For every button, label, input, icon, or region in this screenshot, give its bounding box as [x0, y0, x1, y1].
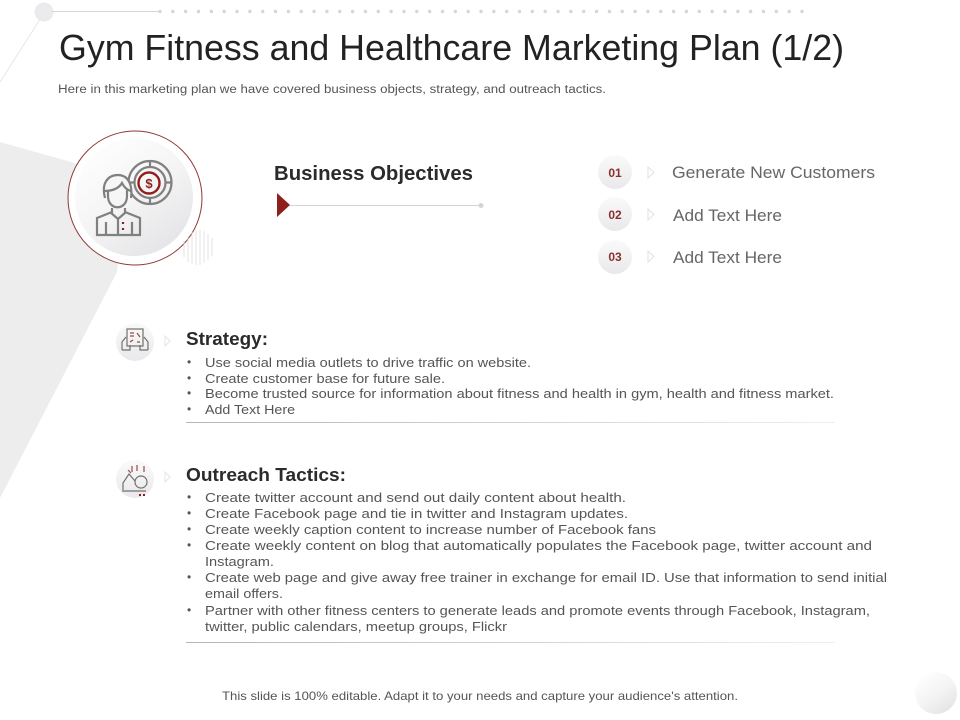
top decoration: [0, 2, 805, 82]
icon: strategy tablet: [116, 323, 154, 361]
list item 02: [598, 197, 782, 231]
text block: strategy list: [187, 355, 834, 417]
icon: outreach network: [116, 460, 154, 498]
text block: outreach list: Create weekly content on blog that automatically populates the Facebook page, twitter account and: [205, 538, 872, 553]
list item 01: Generate New Customers: [672, 163, 875, 182]
text block: outreach list: Create twitter account and send out daily content about health.: [205, 490, 626, 505]
heading: outreach tactics: Outreach Tactics:: [186, 465, 346, 485]
text block: strategy list: •: [187, 355, 191, 369]
heading: strategy: Strategy:: [186, 329, 268, 349]
background shape: [0, 142, 128, 498]
text block: outreach list: •: [187, 603, 191, 617]
text block: strategy list: Use social media outlets to drive traffic on website.: [205, 355, 531, 370]
text block: strategy list: •: [187, 386, 191, 400]
text block: strategy list: Add Text Here: [205, 402, 295, 417]
decorative lines: [184, 230, 212, 265]
icon: person: [97, 175, 140, 235]
corner decoration: [915, 672, 957, 714]
arrow: strategy: [165, 336, 170, 346]
list item 03: 03: [608, 250, 622, 264]
text block: outreach list: Create web page and give away free trainer in exchange for email ID. Use that information to send initial: [205, 570, 887, 585]
icon: target with dollar: $: [145, 176, 153, 191]
text block: outreach list: [187, 490, 887, 634]
text block: strategy list: •: [187, 371, 191, 385]
text block: strategy list: Create customer base for future sale.: [205, 371, 445, 386]
text block: outreach list: •: [187, 538, 191, 552]
arrow: outreach: [165, 472, 170, 482]
list item 03: Add Text Here: [673, 248, 782, 267]
list item 03: [598, 240, 782, 274]
text block: outreach list: twitter, public calendars, meetup groups, Flickr: [205, 619, 508, 634]
text block: strategy list: •: [187, 402, 191, 416]
footer note: This slide is 100% editable. Adapt it to your needs and capture your audience's attention.: [222, 689, 738, 703]
text block: outreach list: •: [187, 570, 191, 584]
list item 01: [598, 155, 875, 189]
text block: outreach list: Instagram.: [205, 554, 274, 569]
list item 02: Add Text Here: [673, 206, 782, 225]
subtitle: Here in this marketing plan we have covered business objects, strategy, and outreach tactics.: [58, 84, 606, 96]
text block: outreach list: Create weekly caption content to increase number of Facebook fans: [205, 522, 657, 537]
text block: outreach list: •: [187, 506, 191, 520]
text block: outreach list: email offers.: [205, 586, 283, 601]
text block: outreach list: •: [187, 490, 191, 504]
text block: outreach list: •: [187, 522, 191, 536]
arrow: objectives pointer: [277, 193, 484, 217]
list item 01: 01: [608, 166, 622, 180]
panel: main icon: [68, 131, 202, 265]
heading: business objectives: Business Objectives: [274, 163, 473, 185]
title: Gym Fitness and Healthcare Marketing Plan (1/2): [59, 27, 844, 68]
list item 02: 02: [608, 208, 622, 222]
text block: outreach list: Partner with other fitness centers to generate leads and promote events through Facebook, Instagram,: [205, 603, 870, 618]
text block: outreach list: Create Facebook page and tie in twitter and Instagram updates.: [205, 506, 628, 521]
text block: strategy list: Become trusted source for information about fitness and health in gym, health and fitness market.: [205, 386, 834, 401]
